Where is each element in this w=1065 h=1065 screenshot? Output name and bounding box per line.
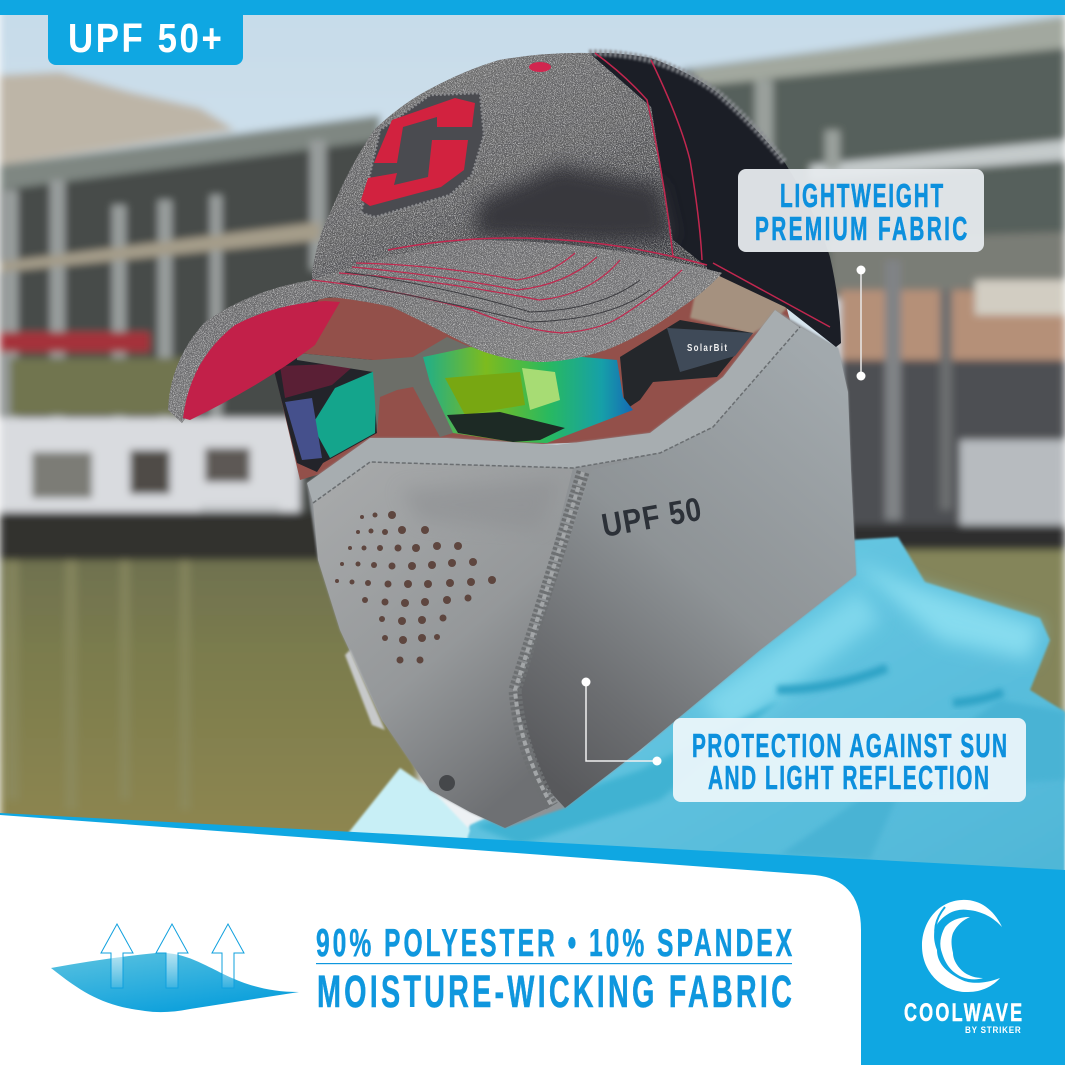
red awning bbox=[0, 332, 150, 352]
UPF 50+ badge: UPF 50+ bbox=[68, 16, 222, 62]
mask right panel bbox=[515, 327, 856, 808]
cap button bbox=[529, 62, 551, 72]
water right bbox=[840, 550, 1065, 720]
snap button bbox=[439, 775, 455, 791]
icon: moisture wicking fabric bbox=[51, 924, 299, 1012]
water left bbox=[0, 560, 420, 840]
orange glow bbox=[840, 290, 1065, 365]
callout: lightweight premium fabric: PREMIUM FABRIC bbox=[755, 210, 967, 247]
mask shading bar bbox=[400, 480, 560, 530]
seam stitching bbox=[515, 472, 583, 806]
glasses arm bbox=[620, 320, 753, 410]
white houseboat bbox=[0, 418, 300, 513]
blue footer band bbox=[0, 813, 1065, 1065]
brim stitches bbox=[312, 253, 682, 333]
fabric composition text: 90% POLYESTER • 10% SPANDEX bbox=[316, 921, 792, 964]
hair behind ear bbox=[690, 273, 790, 334]
right roof and structure bbox=[680, 18, 1065, 300]
left columns bbox=[2, 140, 326, 540]
boathouse interior bbox=[0, 135, 380, 560]
callout: protection against sun bbox=[673, 718, 1026, 802]
mask face panel bbox=[313, 462, 573, 828]
boats right bbox=[840, 360, 1065, 550]
trees bbox=[0, 72, 235, 165]
left lens bbox=[272, 353, 377, 472]
UPF 50+ badge bbox=[48, 10, 243, 65]
leader line: protection callout bbox=[582, 678, 662, 766]
carbon frame bridge bbox=[297, 337, 470, 437]
crown stitching bbox=[388, 53, 830, 327]
hood: turquoise shirt bbox=[349, 537, 1065, 880]
sunglasses bbox=[272, 320, 753, 472]
Coolwave logo bbox=[904, 900, 1022, 1035]
top blue bar bbox=[0, 0, 1065, 15]
fabric composition text: MOISTURE-WICKING FABRIC bbox=[317, 968, 792, 1018]
left beam bbox=[0, 222, 320, 272]
left roof bbox=[0, 115, 380, 190]
leader line: lightweight callout bbox=[856, 266, 866, 380]
brim underside bbox=[183, 301, 340, 420]
green tint bbox=[10, 358, 190, 416]
nose highlight bbox=[345, 650, 385, 730]
perforations bbox=[335, 511, 496, 664]
Coolwave logo: COOLWAVE bbox=[904, 998, 1022, 1027]
brand text on arm: SolarBit bbox=[687, 342, 727, 353]
callout: protection against sun: AND LIGHT REFLECTION bbox=[708, 759, 989, 796]
baseball cap bbox=[168, 53, 841, 423]
hood lower left bbox=[349, 768, 470, 845]
Coolwave logo: BY STRIKER bbox=[965, 1025, 1021, 1035]
callout: lightweight premium fabric: LIGHTWEIGHT bbox=[780, 177, 943, 214]
face skin bbox=[272, 285, 790, 480]
neck gaiter and face mask bbox=[307, 310, 856, 828]
right lens bbox=[423, 347, 633, 443]
photo background: marina bbox=[0, 0, 1065, 840]
cap brim bbox=[168, 240, 722, 423]
callout: lightweight premium fabric bbox=[738, 169, 984, 252]
crown bbox=[312, 53, 707, 290]
water reflections bbox=[5, 560, 190, 810]
white footer panel bbox=[0, 815, 861, 1065]
hood folds bbox=[777, 668, 1003, 703]
callout: protection against sun: PROTECTION AGAINST SUN bbox=[692, 727, 1007, 764]
fabric composition text bbox=[316, 921, 792, 1018]
mesh back bbox=[589, 53, 841, 347]
upper band bbox=[307, 310, 800, 503]
UPF 50 mask print: UPF 50 bbox=[599, 491, 704, 544]
cap logo patch bbox=[361, 93, 484, 217]
wicking arrows bbox=[101, 924, 244, 988]
